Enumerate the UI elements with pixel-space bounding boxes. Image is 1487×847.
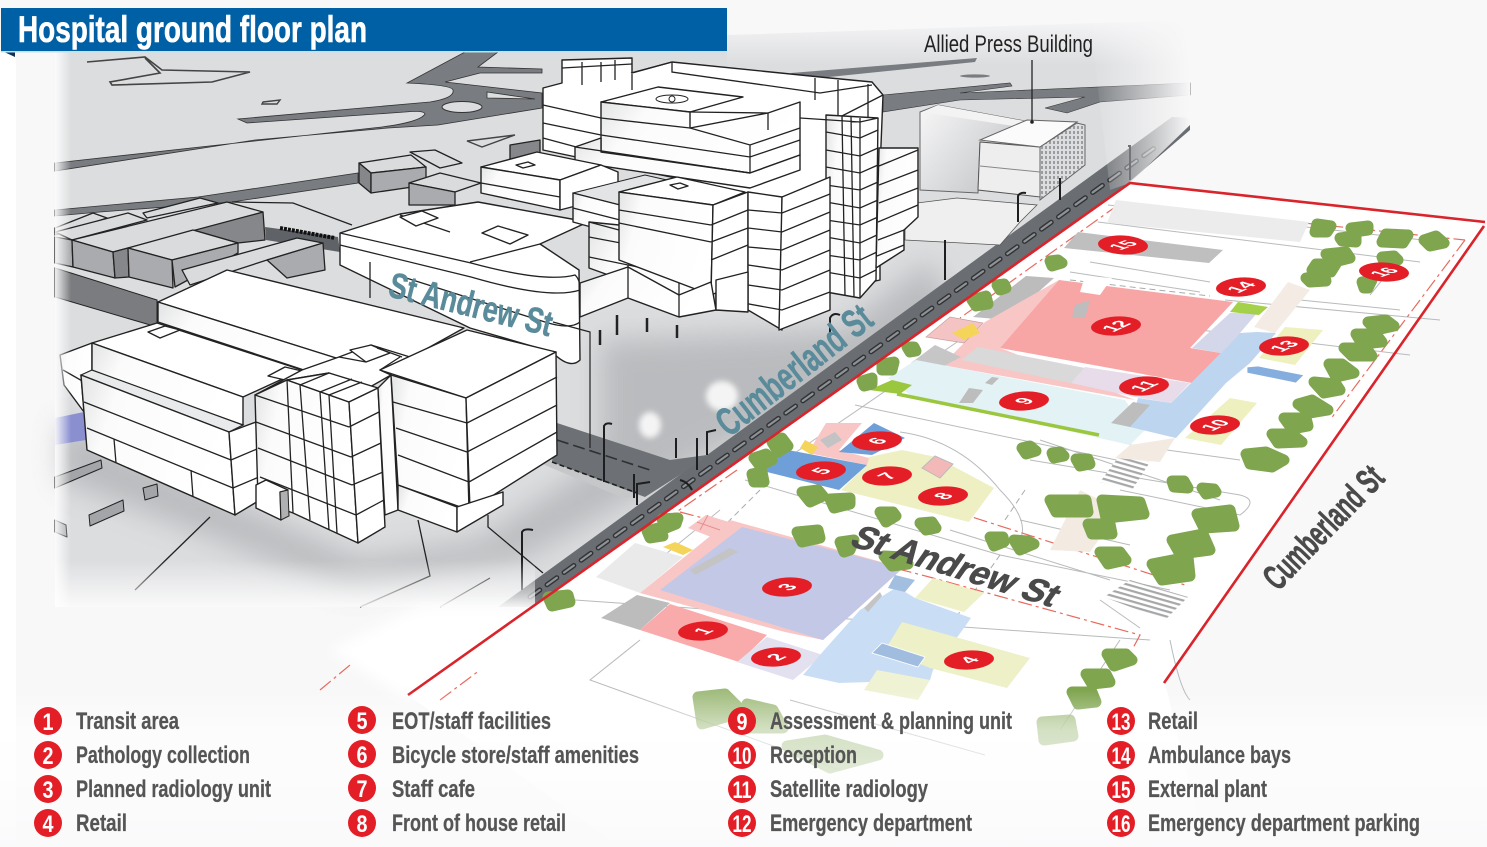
road: upper far — [791, 58, 977, 80]
upper roof — [92, 323, 302, 397]
road: junction and long diagonal — [55, 52, 542, 171]
legend item 9 — [728, 707, 1012, 736]
legend item 13 — [1107, 707, 1198, 736]
plan zone 15 upper grey area — [1107, 200, 1309, 242]
legend item 14: 14 — [1112, 743, 1131, 770]
badge 8: 8 — [929, 491, 960, 502]
plan grey band — [961, 347, 1085, 383]
white street trees — [639, 381, 738, 438]
blue bike parking — [55, 412, 86, 445]
legend item 3: Planned radiology unit — [76, 776, 271, 803]
plan tan access strip — [1254, 282, 1310, 333]
legend item 1: Transit area — [76, 708, 179, 735]
legend item 6 — [348, 740, 639, 769]
badge 8 — [917, 485, 969, 507]
legend item 2: 2 — [42, 743, 54, 770]
legend — [34, 706, 1420, 838]
shadows under buildings — [60, 260, 960, 590]
wheel-stops and small walls — [55, 460, 158, 537]
fade of aerial view — [55, 20, 1190, 607]
legend item 4: 4 — [42, 811, 54, 838]
badge 2 — [750, 646, 802, 668]
landscape trees — [548, 224, 1444, 704]
legend item 10 — [728, 741, 857, 770]
legend item 4 — [34, 809, 127, 838]
plan zones 5 6 7 8 block — [763, 423, 994, 522]
badge 10: 10 — [1196, 418, 1236, 433]
badge 13 — [1258, 335, 1310, 357]
plan grey stubs in zone 9 — [959, 377, 999, 403]
legend item 14 — [1107, 741, 1291, 770]
badge 4: 4 — [955, 655, 986, 666]
legend item 5: 5 — [356, 708, 368, 735]
legend item 5 — [348, 706, 551, 735]
leader line: St Andrew St — [553, 322, 590, 448]
badge 12 — [1090, 315, 1142, 337]
legend item 2: Pathology collection — [76, 742, 250, 769]
small road island right — [960, 74, 990, 78]
badge 9: 9 — [1010, 396, 1041, 407]
red dashed boundary — [320, 205, 1465, 700]
badge 15 — [1098, 234, 1148, 256]
badge 7 — [861, 465, 913, 487]
legend item 15: External plant — [1148, 776, 1267, 803]
background buildings, left — [55, 140, 540, 288]
plan small grey stub — [1111, 402, 1150, 427]
plan grey service area — [973, 276, 1054, 320]
legend item 3 — [34, 775, 271, 804]
left margin strip — [0, 52, 16, 847]
central tower — [255, 380, 358, 543]
legend backdrop fade — [0, 690, 1487, 847]
legend item 12: Emergency department — [770, 810, 972, 837]
badge 4 — [943, 649, 995, 671]
legend column 2 — [348, 706, 639, 838]
road: right of towers — [883, 83, 1190, 113]
legend item 3: 3 — [42, 777, 54, 804]
white wedge left of the plan — [330, 607, 540, 700]
small ground shapes — [262, 100, 515, 147]
connector roof — [255, 345, 410, 395]
title banner — [1, 8, 727, 57]
lower-left hospital building — [60, 270, 557, 543]
street label: Cumberland St on plan: Cumberland St — [1254, 457, 1392, 598]
legend item 7: Staff cafe — [392, 776, 475, 803]
badge 3: 3 — [773, 582, 804, 593]
upper rear hospital tower — [543, 58, 883, 292]
plan zones 1 2 3 4 block — [596, 515, 1030, 700]
legend item 15: 15 — [1112, 777, 1130, 804]
badge 3 — [761, 576, 813, 598]
street lamps — [522, 146, 1130, 590]
legend item 11: 11 — [732, 777, 752, 804]
legend item 12: 12 — [732, 811, 752, 838]
plan green block — [869, 380, 912, 394]
badge 15: 15 — [1104, 239, 1144, 252]
legend item 6: 6 — [356, 742, 368, 769]
legend item 8: 8 — [356, 811, 368, 838]
stilts — [600, 315, 677, 345]
left mid block — [481, 152, 680, 235]
legend item 12 — [728, 809, 972, 838]
outlined pond on ground — [87, 57, 250, 85]
aerial view: ground and surrounding roads — [55, 15, 1190, 607]
red site boundary — [408, 183, 1485, 695]
plan lines — [575, 205, 1450, 770]
badge 1: 1 — [689, 626, 720, 637]
badge 13: 13 — [1265, 339, 1305, 354]
badge 14: 14 — [1222, 280, 1262, 295]
plan blue window cells — [1247, 366, 1304, 383]
road: lower left — [55, 268, 157, 327]
main front tower — [580, 177, 830, 345]
plan zone 15 external plant — [1064, 232, 1223, 263]
building label: Allied Press Building — [924, 31, 1093, 124]
plan zone 12 emergency department — [1000, 280, 1233, 383]
legend column 3 — [728, 707, 1012, 838]
badge 5: 5 — [807, 466, 838, 477]
badge 16: 16 — [1365, 266, 1405, 279]
plan green strip top — [1230, 302, 1268, 315]
badge 5 — [795, 460, 847, 482]
plan white notch — [1080, 276, 1112, 295]
badge 9 — [998, 390, 1050, 412]
legend item 7 — [348, 774, 475, 803]
plan bay cells — [926, 317, 983, 343]
legend item 16: 16 — [1112, 811, 1130, 838]
legend item 7: 7 — [356, 776, 368, 803]
building label: Allied Press Building: Allied Press Building — [924, 31, 1093, 58]
tower column grid — [800, 115, 918, 298]
legend item 6: Bicycle store/staff amenities — [392, 742, 639, 769]
plan map badges — [677, 234, 1409, 671]
plan zone 11 satellite radiology — [1071, 367, 1190, 403]
plan yellow cells by bays — [952, 323, 980, 340]
legend item 13: 13 — [1112, 709, 1130, 736]
legend item 2 — [34, 741, 250, 770]
ground outline behind blocks — [232, 202, 352, 225]
badge 7: 7 — [873, 471, 903, 482]
badge 2: 2 — [762, 652, 792, 663]
street label: St Andrew St on plan: St Andrew St — [843, 519, 1069, 614]
road island — [442, 102, 482, 112]
site plan sheet — [320, 183, 1485, 847]
plan grey notch — [1072, 300, 1090, 318]
legend item 11 — [728, 775, 928, 804]
zebra crossings and paths — [1050, 438, 1188, 620]
badge 14 — [1215, 276, 1267, 298]
plan zone 10 reception corridor — [1130, 332, 1276, 438]
badge 12: 12 — [1097, 319, 1137, 334]
legend item 9: 9 — [736, 709, 748, 736]
plan zone 13 retail — [1259, 327, 1323, 365]
legend item 15 — [1107, 775, 1267, 804]
plaza near Allied Press Building — [905, 198, 1037, 245]
badge 10 — [1189, 414, 1241, 436]
plan lavender area — [1192, 313, 1257, 353]
legend item 1: 1 — [42, 709, 54, 736]
curved St Andrew St building — [340, 202, 588, 364]
legend item 1 — [34, 707, 179, 736]
plan zone 12 surround — [942, 280, 1135, 400]
legend item 13: Retail — [1148, 708, 1198, 735]
Allied Press Building — [920, 105, 1085, 200]
legend item 14: Ambulance bays — [1148, 742, 1291, 769]
legend item 4: Retail — [76, 810, 127, 837]
badge 16 — [1359, 261, 1409, 283]
front block — [81, 375, 235, 515]
legend item 10: 10 — [732, 743, 752, 770]
badge 1 — [677, 620, 729, 642]
badge 11 — [1118, 375, 1170, 397]
legend item 10: Reception — [770, 742, 857, 769]
legend item 16 — [1107, 809, 1420, 838]
road: Cumberland St in 3D view — [498, 117, 1190, 607]
right block — [378, 375, 398, 515]
stub block — [60, 343, 92, 412]
legend item 8 — [348, 809, 566, 838]
road: second diagonal — [55, 173, 358, 216]
faded trees under legend — [698, 694, 1073, 768]
long top slab — [158, 270, 464, 368]
small box — [256, 480, 288, 520]
plan green strip — [897, 394, 1099, 435]
ground lines — [135, 515, 543, 607]
legend item 8: Front of house retail — [392, 810, 566, 837]
plan zone 9 assessment unit — [888, 360, 1145, 445]
badge 6 — [851, 430, 903, 452]
legend item 9: Assessment & planning unit — [770, 708, 1012, 735]
plan grey bay — [911, 345, 961, 367]
road median — [487, 92, 535, 99]
legend column 4 — [1107, 707, 1420, 838]
badge 11: 11 — [1126, 379, 1165, 394]
legend column 1 — [34, 707, 271, 838]
street label: St Andrew St on building: St Andrew St — [385, 264, 557, 344]
legend item 5: EOT/staff facilities — [392, 708, 551, 735]
legend item 11: Satellite radiology — [770, 776, 928, 803]
title banner: Hospital ground floor plan — [18, 9, 367, 50]
road: short left road with label — [265, 227, 340, 252]
street label: Cumberland St in 3D view: Cumberland St — [707, 296, 881, 445]
plan zone 10 retail yellow — [1185, 398, 1257, 445]
cross street — [540, 458, 645, 498]
badge 6: 6 — [863, 436, 894, 447]
